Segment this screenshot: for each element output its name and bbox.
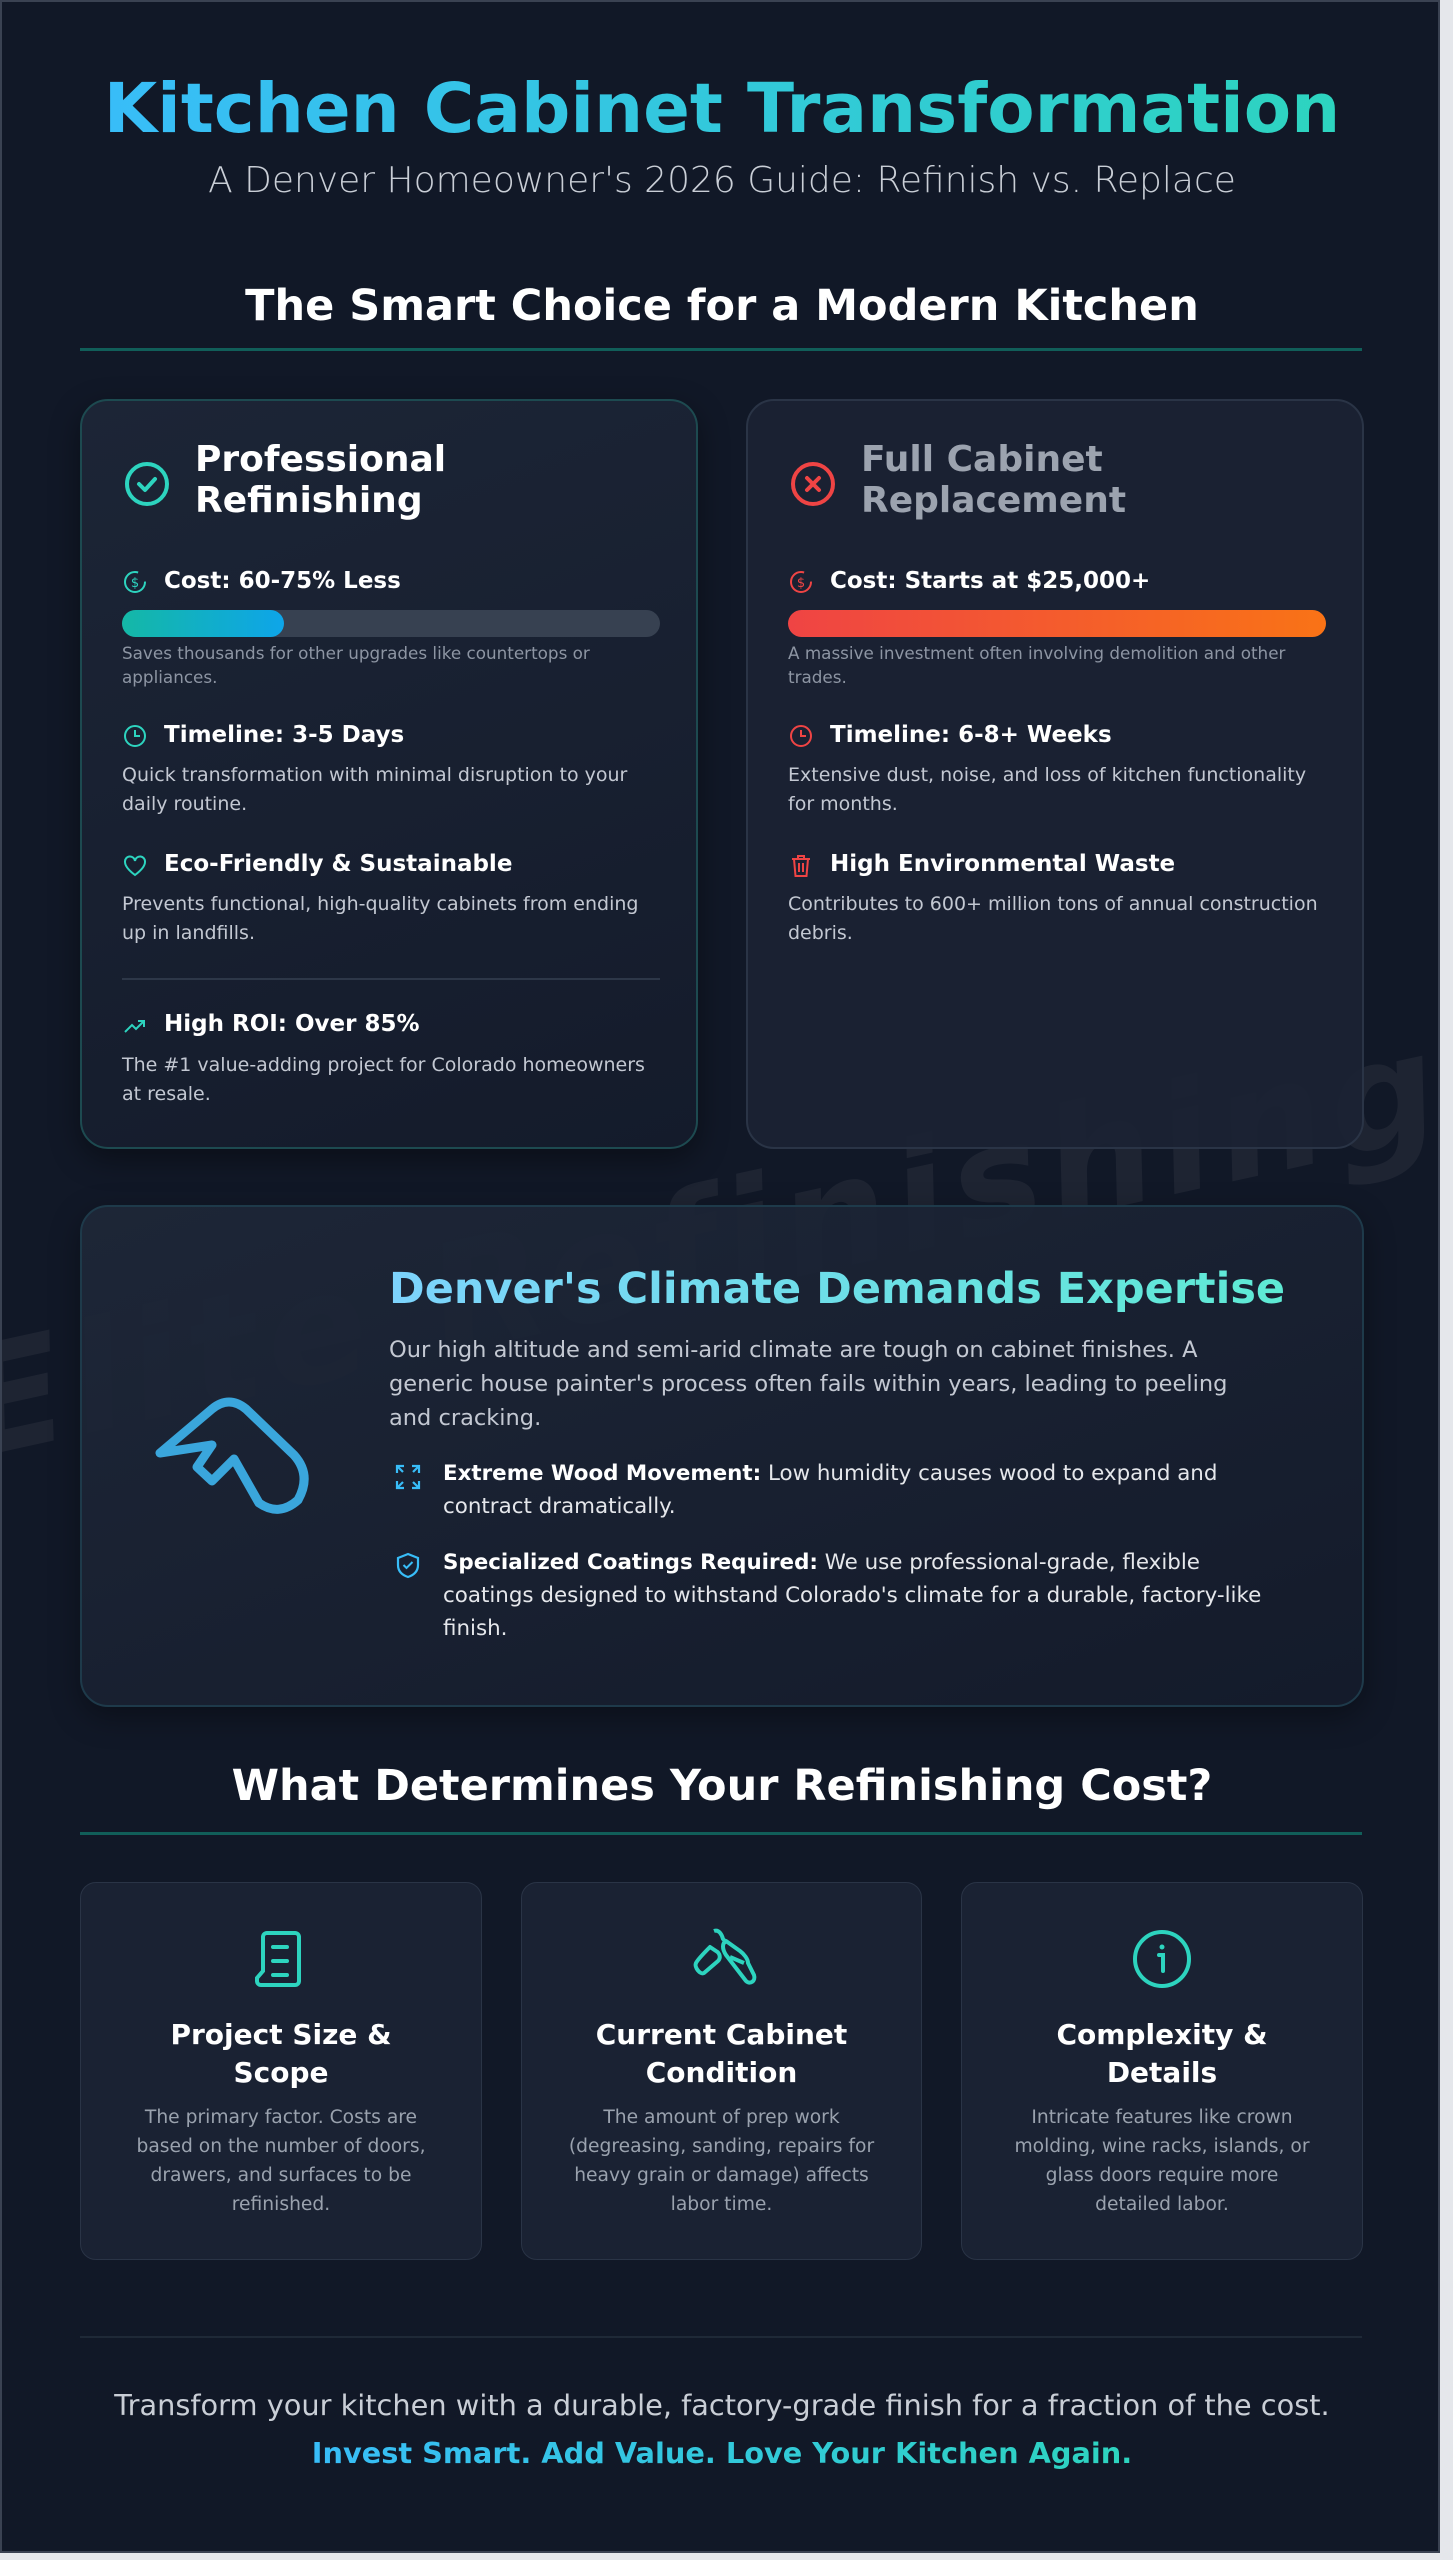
cost heading: Cost: 60-75% Less — [164, 568, 401, 594]
card: project size: Project Size & — [170, 2018, 392, 2051]
card: complexity — [961, 1882, 1363, 2260]
footer tagline: Invest Smart. Add Value. Love Your Kitchen Again. — [312, 2436, 1132, 2470]
card: project size: The primary factor. Costs are based on the number of doors, drawers, and surfaces to be refinished. — [136, 2107, 426, 2215]
icon: trend — [124, 1020, 145, 1033]
heading: Professional — [195, 439, 446, 480]
panel: full replacement: Cost: Starts at $25,000+ — [830, 568, 1150, 594]
card: cabinet condition: Condition — [646, 2056, 797, 2089]
icon: shield — [396, 1552, 420, 1578]
panel: full replacement: $ — [797, 576, 805, 591]
card: project size: Scope — [233, 2056, 329, 2089]
panel: professional refinishing — [80, 399, 698, 1149]
card: cabinet condition: The amount of prep work (degreasing, sanding, repairs for heavy grain or damage) affects labor time. — [569, 2107, 874, 2215]
panel: full replacement: High Environmental Waste — [830, 851, 1175, 877]
bar — [788, 610, 1326, 637]
icon: clock — [124, 725, 146, 747]
icon: hand — [156, 1398, 309, 1514]
card: cabinet condition: Current Cabinet — [596, 2018, 847, 2051]
icon: check circle — [125, 462, 169, 506]
panel: denver climate — [80, 1205, 1364, 1707]
bar — [122, 610, 660, 637]
panel: professional refinishing: Eco-Friendly & Sustainable — [164, 851, 512, 877]
panel: professional refinishing: High ROI: Over 85% — [164, 1011, 420, 1037]
panel: professional refinishing: Quick transformation with minimal disruption to your daily routine. — [122, 764, 627, 815]
panel: full replacement: Replacement — [861, 480, 1126, 521]
panel: full replacement: Timeline: 6-8+ Weeks — [830, 722, 1112, 748]
bullet 2: Specialized Coatings Required: We use professional-grade, flexible coatings designed to withstand Colorado's climate for a durable, factory-like finish. — [443, 1550, 1261, 1641]
card: complexity: Intricate features like crown molding, wine racks, islands, or glass doors require more detailed labor. — [1014, 2107, 1310, 2215]
heading: Refinishing — [195, 480, 423, 521]
panel: full replacement: Contributes to 600+ million tons of annual construction debris. — [788, 893, 1318, 944]
panel: professional refinishing: The #1 value-adding project for Colorado homeowners at resale. — [122, 1054, 645, 1105]
heading: Denver's Climate Demands Expertise — [389, 1264, 1285, 1314]
panel: professional refinishing: Timeline: 3-5 Days — [164, 722, 404, 748]
card: complexity: Details — [1107, 2056, 1217, 2089]
panel: full replacement: Extensive dust, noise, and loss of kitchen functionality for months. — [788, 764, 1306, 815]
panel: professional refinishing: Prevents functional, high-quality cabinets from ending up in landfills. — [122, 893, 638, 944]
bullet 1: Extreme Wood Movement: Low humidity causes wood to expand and contract dramatically. — [443, 1461, 1217, 1519]
icon: expand — [396, 1464, 420, 1490]
text block: Our high altitude and semi-arid climate are tough on cabinet finishes. A generic house painter's process often fails within years, leading to peeling and cracking. — [389, 1337, 1227, 1431]
icon: heart — [124, 856, 146, 876]
title: Kitchen Cabinet Transformation — [104, 69, 1340, 149]
section heading: smart choice: The Smart Choice for a Modern Kitchen — [245, 281, 1199, 331]
panel: professional refinishing: Saves thousands for other upgrades like countertops or appliances. — [122, 643, 590, 687]
section heading: cost factors: What Determines Your Refinishing Cost? — [232, 1761, 1212, 1811]
card: complexity: Complexity & — [1056, 2018, 1268, 2051]
panel: full replacement: A massive investment often involving demolition and other trades. — [788, 643, 1285, 687]
card: project size — [80, 1882, 482, 2260]
icon: dollar: $ — [131, 576, 139, 591]
panel: full replacement: Full Cabinet — [861, 439, 1103, 480]
heading — [195, 439, 446, 521]
subtitle: A Denver Homeowner's 2026 Guide: Refinish vs. Replace — [208, 160, 1236, 201]
icon: dollar — [124, 571, 146, 593]
icon: x circle — [791, 462, 835, 506]
card: cabinet condition — [521, 1882, 922, 2260]
panel: full replacement — [746, 399, 1364, 1149]
footer text: Transform your kitchen with a durable, factory-grade finish for a fraction of the cost. — [114, 2388, 1330, 2422]
icon: trash — [792, 855, 810, 877]
